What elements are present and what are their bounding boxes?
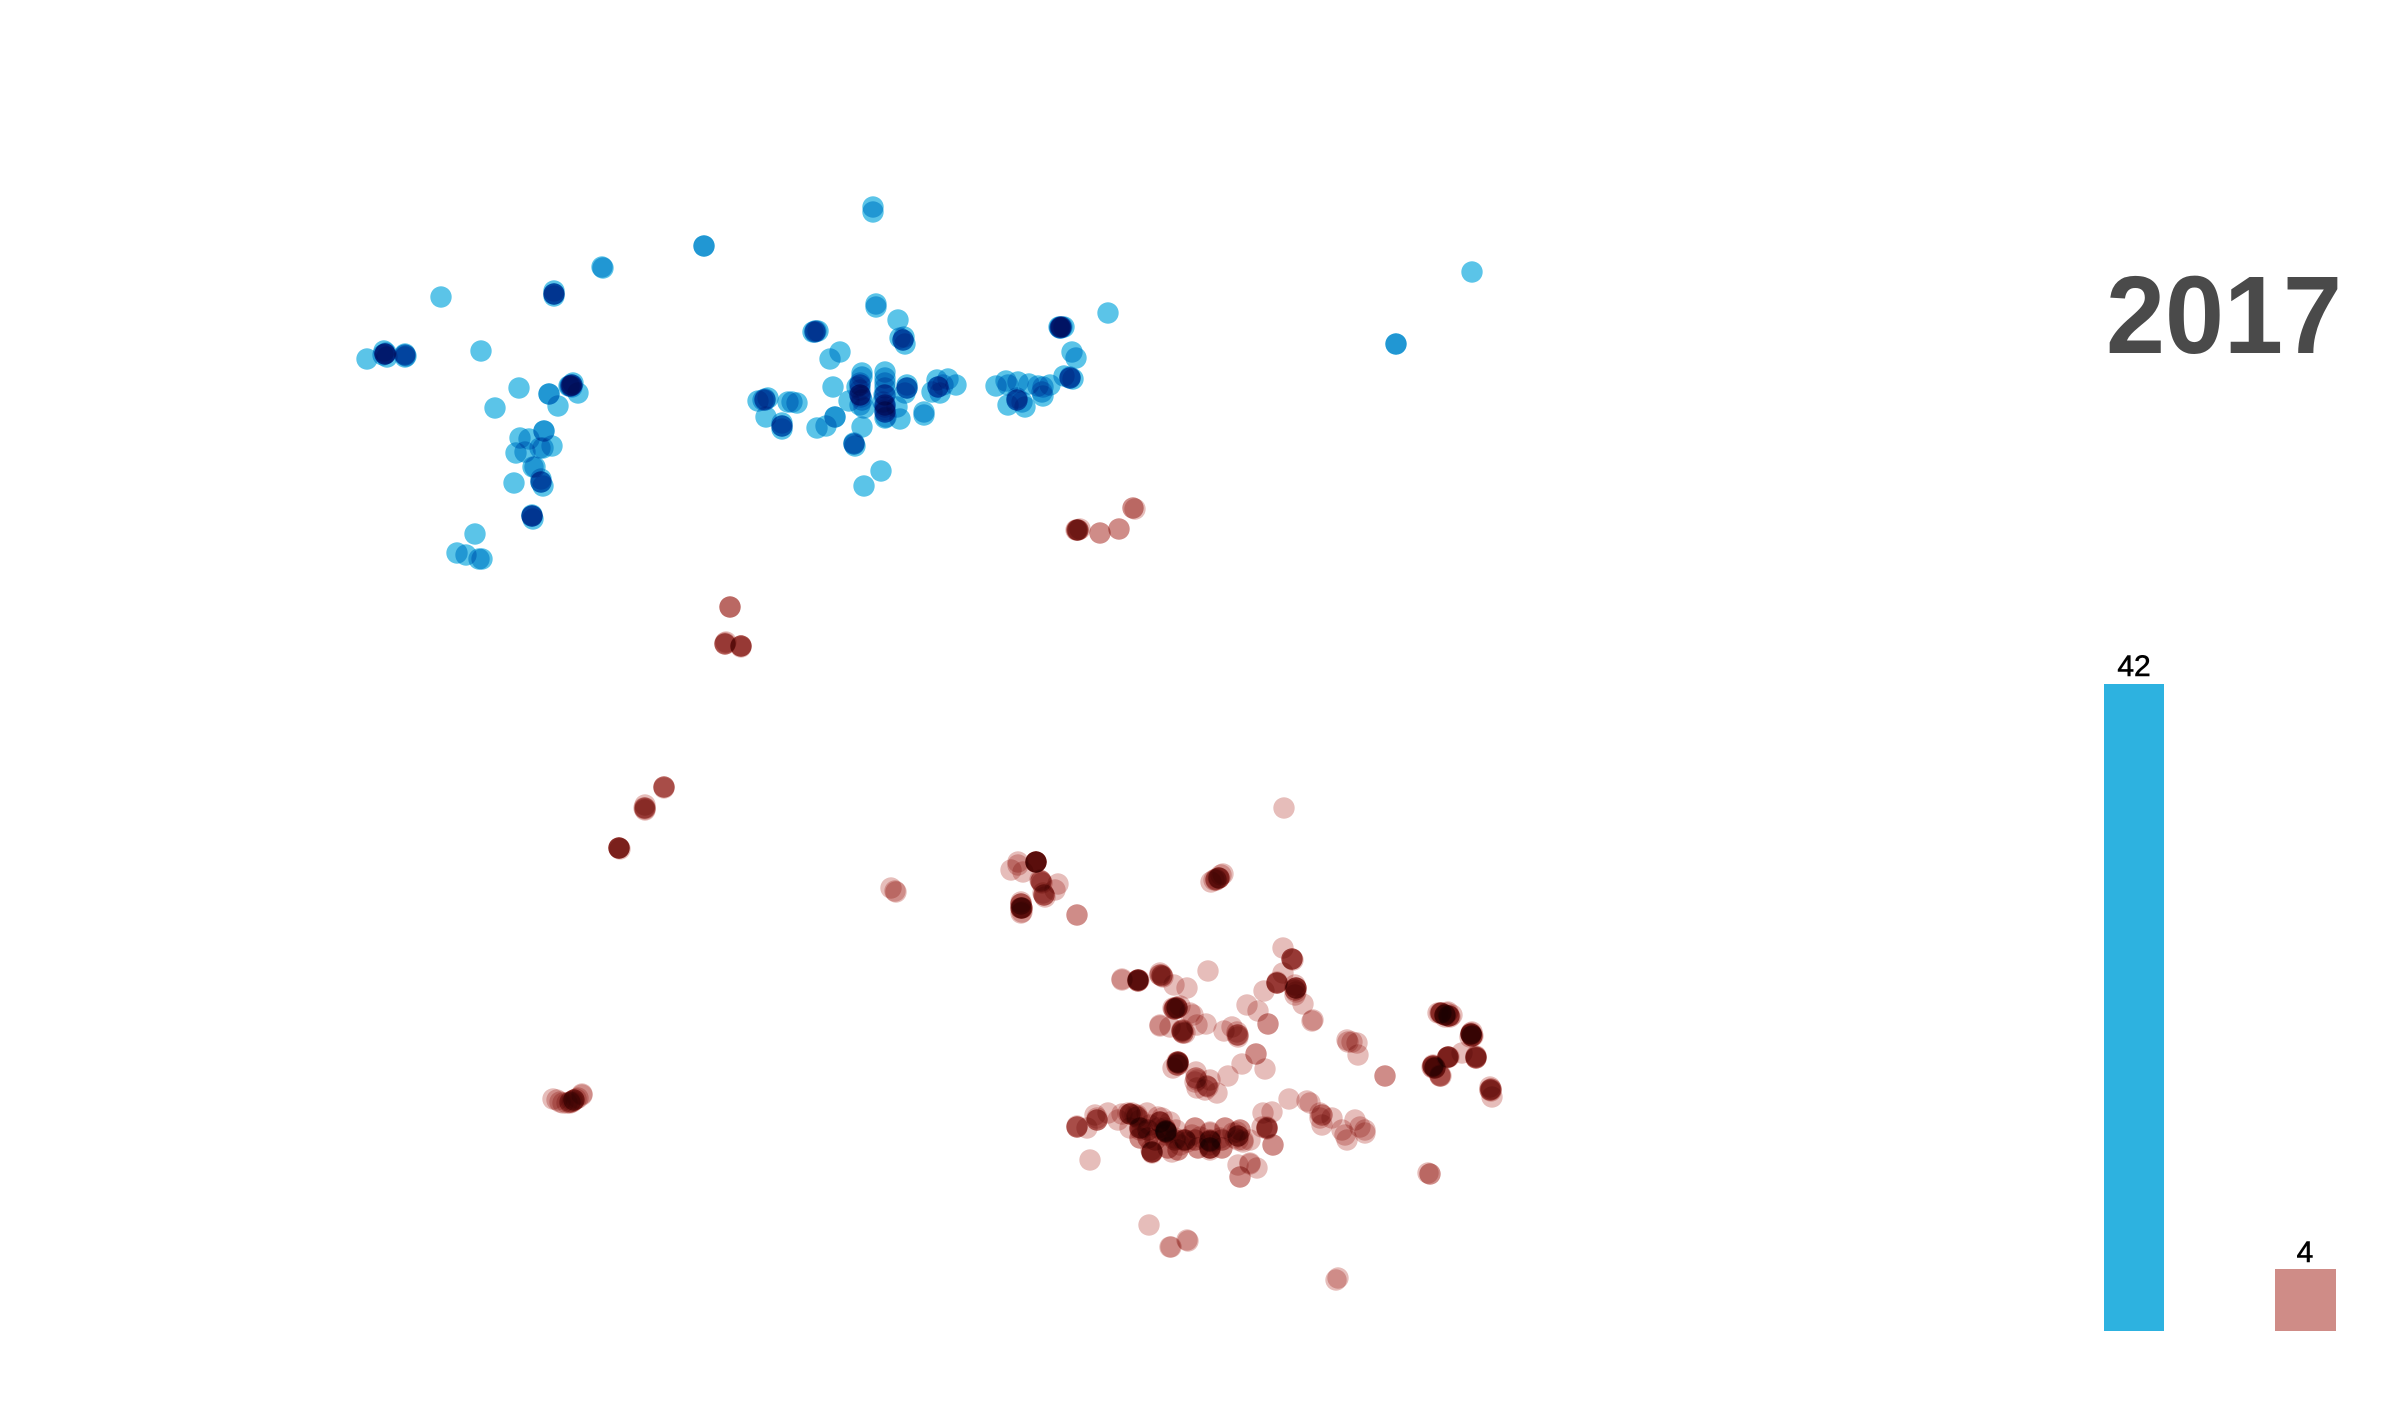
scatter points: red cluster xyxy=(542,497,1503,1291)
bar chart: counts xyxy=(2104,650,2336,1331)
year heading: 2017 xyxy=(2106,254,2342,377)
value label: 4: 4 xyxy=(2297,1236,2313,1269)
bar: red count xyxy=(2275,1269,2336,1331)
value label: 42: 42 xyxy=(2117,650,2151,683)
scatter points: blue cluster xyxy=(356,196,1483,570)
bar: blue count xyxy=(2104,684,2164,1331)
